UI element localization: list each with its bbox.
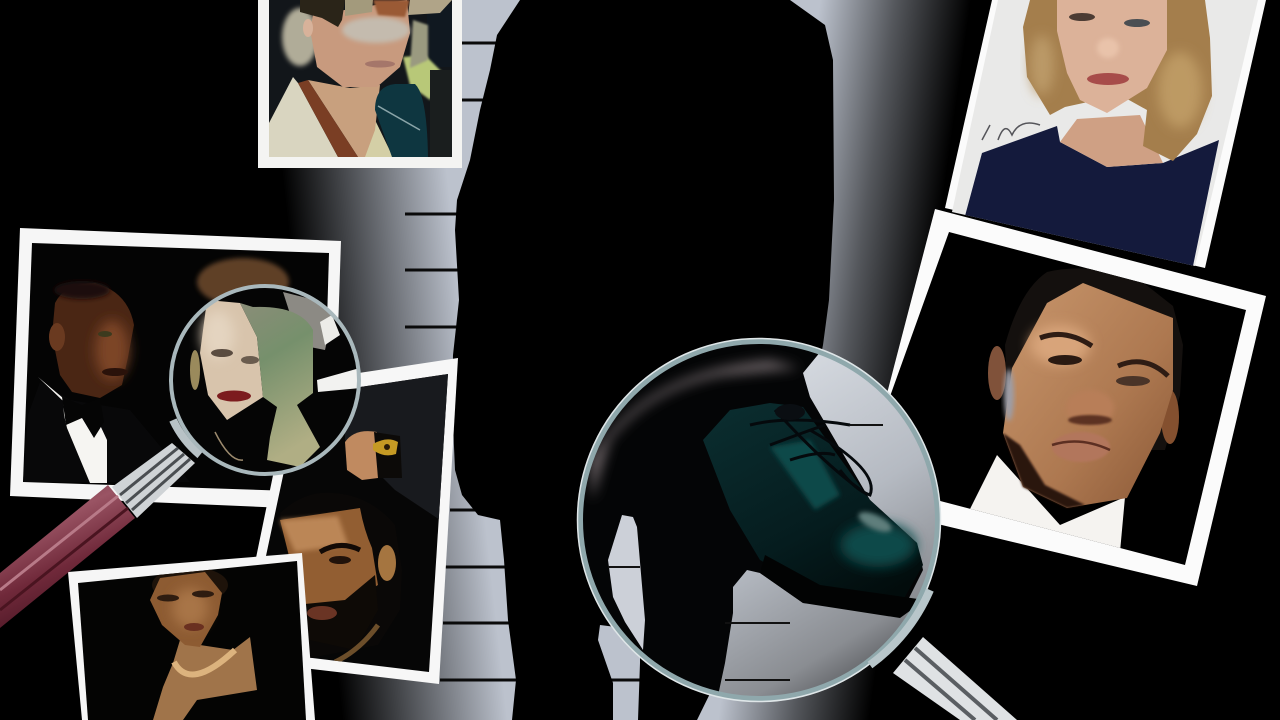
- handle: metal shaft: [112, 420, 200, 518]
- sleeve highlight: [590, 360, 800, 500]
- enlarged dark leg: [570, 340, 923, 705]
- photo: blonde woman in navy sweater: [945, 0, 1270, 270]
- lens rim: [578, 338, 940, 702]
- light gap left of leg: [608, 515, 645, 650]
- magnifying glass: right: [570, 335, 1017, 720]
- handle: red grip: [0, 485, 135, 628]
- photo: woman with gold necklace: [68, 553, 315, 720]
- silhouette of figure: [452, 0, 834, 720]
- magnifying glass: left: [0, 285, 360, 628]
- laces: [750, 410, 871, 495]
- lens: woman with green hair: [190, 288, 357, 472]
- photo: man in tuxedo: [10, 228, 341, 510]
- photo: woman with glasses: [258, 0, 462, 168]
- lens: shoe close-up: [584, 350, 935, 696]
- green shoe: [703, 403, 923, 600]
- photo: bearded man with owl: [235, 358, 458, 684]
- height chart lines: [405, 43, 782, 680]
- lens rim: [171, 286, 359, 474]
- photo: man in white shirt: [858, 209, 1266, 586]
- shoe sole: [760, 555, 925, 618]
- handle: metal shaft: [893, 637, 1017, 720]
